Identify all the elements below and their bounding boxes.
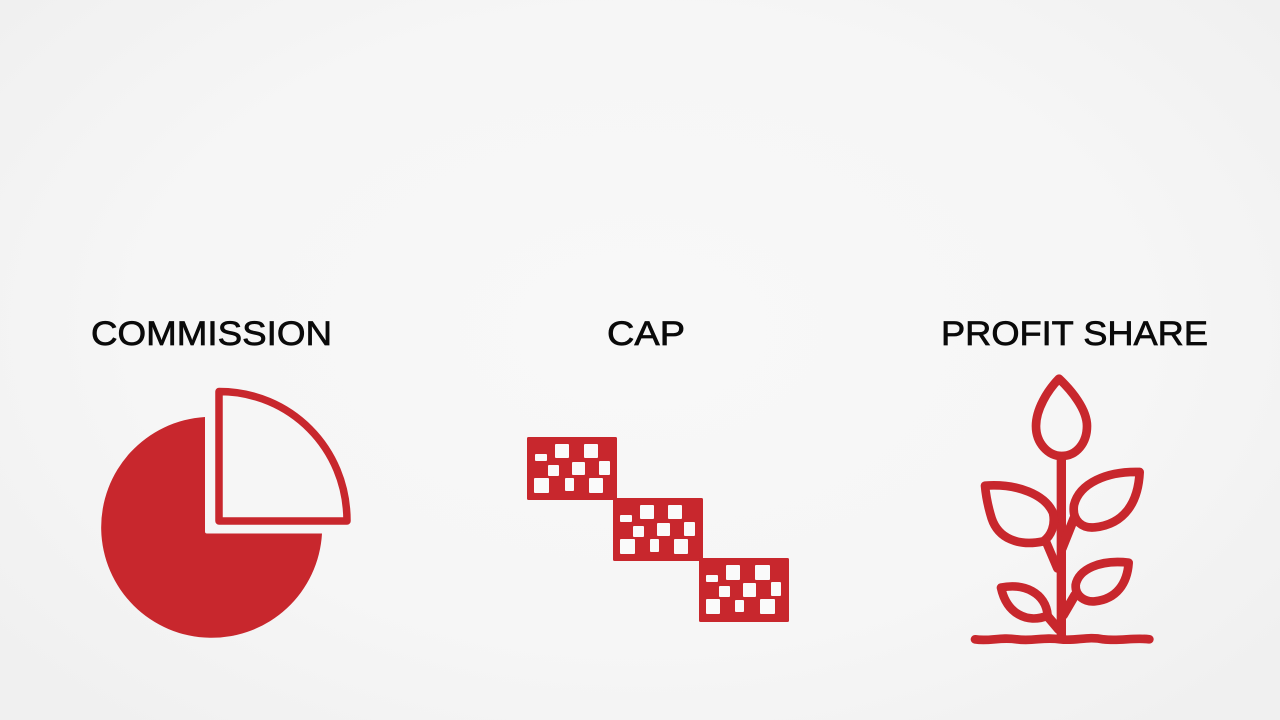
- heading: commission: COMMISSION: [91, 315, 332, 353]
- upper left leaf: [985, 485, 1054, 543]
- lower right leaf: [1076, 562, 1129, 601]
- icon: plant with leaves: [975, 379, 1149, 640]
- icon: pie chart with separated quarter slice: [101, 392, 347, 638]
- heading: profit share: PROFIT SHARE: [941, 315, 1208, 353]
- heading: cap: CAP: [607, 315, 685, 353]
- ground line: [975, 638, 1149, 640]
- pie body: [101, 417, 322, 638]
- block 2: [613, 498, 703, 561]
- block 3: [699, 558, 789, 622]
- outlined quarter slice: [219, 392, 347, 521]
- lower left leaf: [1001, 586, 1048, 618]
- stem: [1047, 458, 1075, 638]
- top bud: [1036, 379, 1087, 456]
- icon: staircase of three checkered blocks: [527, 437, 789, 622]
- upper right leaf: [1074, 472, 1140, 527]
- block 1: [527, 437, 617, 500]
